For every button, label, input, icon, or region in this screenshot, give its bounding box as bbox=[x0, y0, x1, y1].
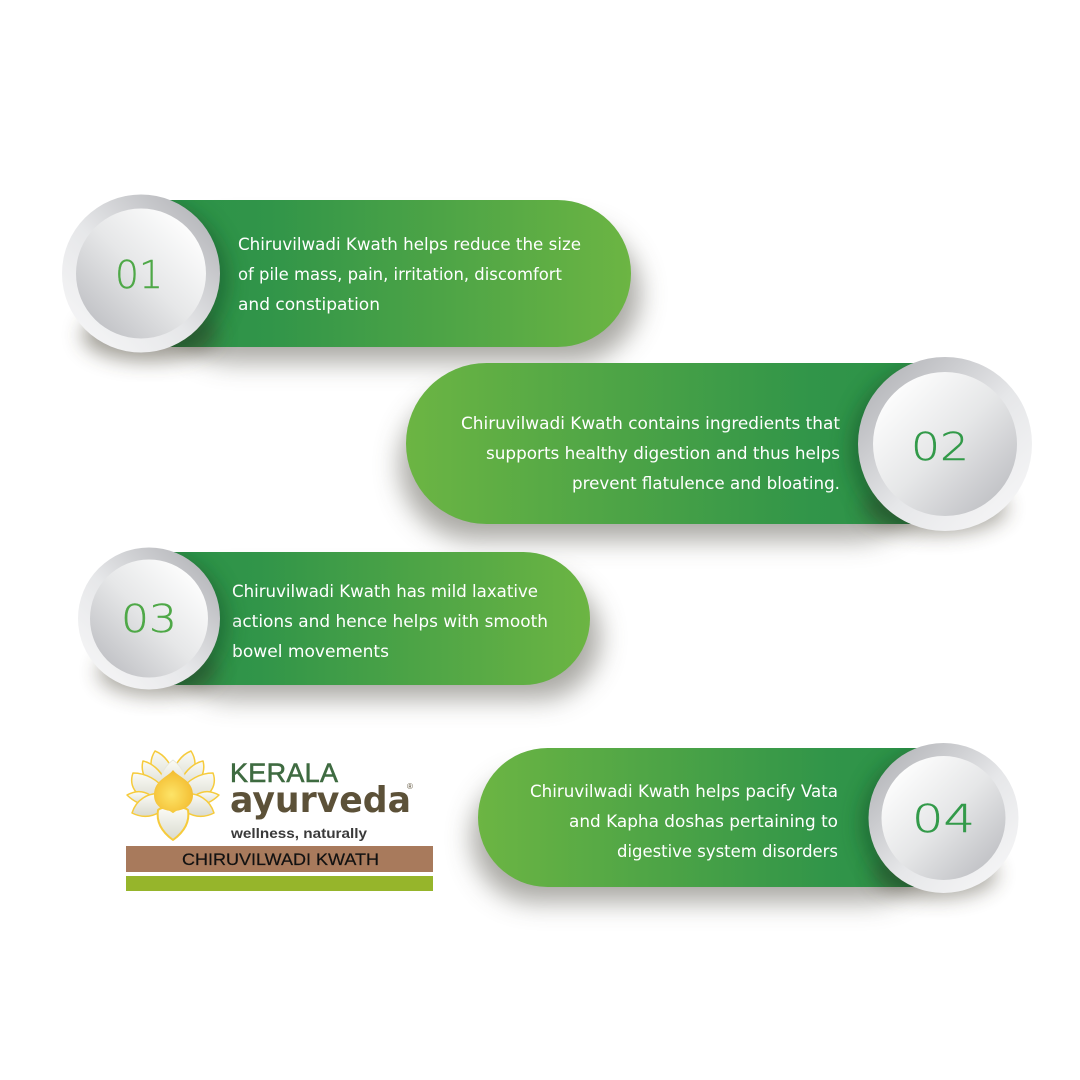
panel: benefit 03 bbox=[78, 548, 600, 699]
panel: benefit 02 bbox=[400, 357, 1032, 540]
panel: benefit 01 bbox=[62, 194, 640, 362]
body text 04: digestive system disorders bbox=[617, 842, 838, 862]
registered mark: ® bbox=[407, 782, 413, 791]
card shadow 02 bbox=[400, 390, 930, 540]
product name bar bbox=[126, 846, 433, 872]
card shadow 04 bbox=[472, 774, 932, 902]
body text 03: Chiruvilwadi Kwath has mild laxative bbox=[232, 582, 538, 602]
body text 03: bowel movements bbox=[232, 642, 389, 662]
panel: brand logo bbox=[126, 751, 433, 891]
green card 01 bbox=[150, 200, 631, 347]
number badge 03: 03 bbox=[121, 597, 177, 641]
green card 04 bbox=[478, 748, 944, 887]
number badge 04: 04 bbox=[912, 797, 975, 841]
green card 02 bbox=[406, 363, 945, 524]
body text 01: Chiruvilwadi Kwath helps reduce the size bbox=[238, 235, 581, 255]
body text 01 bbox=[238, 235, 581, 315]
body text 03: actions and hence helps with smooth bbox=[232, 612, 548, 632]
green accent bar bbox=[126, 876, 433, 891]
product name bar: CHIRUVILWADI KWATH bbox=[182, 850, 379, 869]
panel: benefit 04 bbox=[472, 743, 1018, 902]
body text 02: Chiruvilwadi Kwath contains ingredients that bbox=[461, 414, 840, 434]
number badge 03 bbox=[78, 548, 227, 696]
card shadow 03 bbox=[170, 577, 600, 699]
body text 04: Chiruvilwadi Kwath helps pacify Vata bbox=[530, 782, 838, 802]
number badge 04 bbox=[861, 743, 1018, 898]
body text 01: of pile mass, pain, irritation, discomfort bbox=[238, 265, 562, 285]
card shadow 01 bbox=[165, 226, 640, 362]
body text 04 bbox=[530, 782, 838, 862]
wordmark: ayurveda: ayurveda bbox=[230, 780, 411, 821]
body text 02: prevent flatulence and bloating. bbox=[572, 474, 840, 494]
green card 03 bbox=[150, 552, 590, 685]
number badge 02: 02 bbox=[911, 425, 969, 469]
tagline: wellness, naturally bbox=[230, 825, 367, 841]
body text 02 bbox=[461, 414, 840, 494]
number badge 02 bbox=[850, 357, 1032, 536]
body text 04: and Kapha doshas pertaining to bbox=[569, 812, 838, 832]
icon: lotus bbox=[127, 751, 219, 840]
number badge 01: 01 bbox=[115, 253, 163, 297]
body text 03 bbox=[232, 582, 548, 662]
wordmark: KERALA: KERALA bbox=[230, 758, 338, 788]
number badge 01 bbox=[62, 194, 228, 361]
body text 01: and constipation bbox=[238, 295, 380, 315]
body text 02: supports healthy digestion and thus helps bbox=[486, 444, 840, 464]
